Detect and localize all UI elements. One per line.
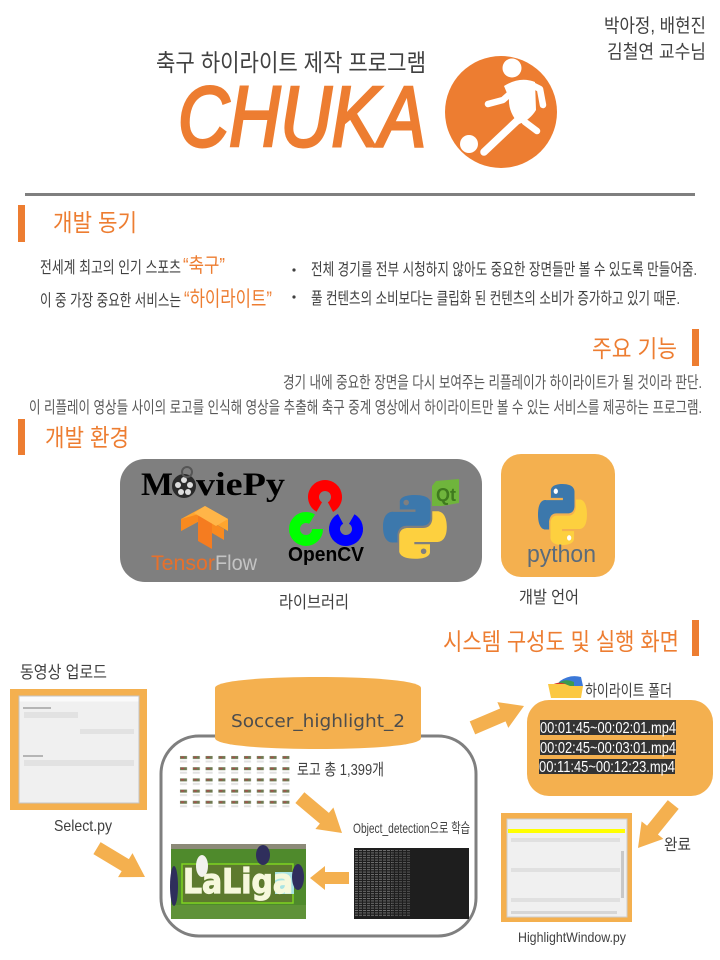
authors xyxy=(604,15,706,63)
authors: 김철연 교수님 xyxy=(607,41,706,63)
logo: OpenCV xyxy=(288,481,365,566)
label: highlight folder: 하이라이트 폴더 xyxy=(585,682,672,700)
logo: MoviePy xyxy=(141,467,286,503)
text: motivation left: “하이라이트” xyxy=(184,288,272,311)
screenshot: Select.py window xyxy=(10,689,147,810)
arrow: thumbnails to training xyxy=(291,787,351,844)
text: motivation left: “축구” xyxy=(183,254,225,277)
panel: python language: python xyxy=(527,541,596,568)
text: motivation left: 이 중 가장 중요한 서비스는 xyxy=(40,291,181,310)
logo: PyQt: Qt xyxy=(436,485,456,505)
logo: OpenCV: OpenCV xyxy=(288,544,365,566)
logo: PyQt xyxy=(383,479,459,559)
caption: libraries: 라이브러리 xyxy=(279,593,349,612)
screenshot: HighlightWindow.py xyxy=(501,813,632,922)
logo: MoviePy: M xyxy=(141,467,173,503)
logo wordmark: CHUKA: CHUKA xyxy=(178,70,426,165)
arrow: database to folder xyxy=(467,693,529,741)
file: clip 3: 00:11:45~00:12:23.mp4 xyxy=(539,759,675,776)
panel: libraries xyxy=(120,459,482,582)
panel: highlight file list xyxy=(527,700,713,796)
heading: main features: 주요 기능 xyxy=(592,336,677,363)
image: LaLiga detection result xyxy=(170,844,306,919)
heading: motivation xyxy=(18,205,137,242)
heading: dev environment xyxy=(18,419,129,455)
logo: TensorFlow xyxy=(151,506,258,575)
logo: MoviePy: viePy xyxy=(196,467,286,503)
authors: 박아정, 배현진 xyxy=(604,15,706,37)
database cylinder: Soccer_highlight_2: Soccer_highlight_2 xyxy=(231,711,405,732)
image: logo training thumbnails xyxy=(177,754,292,810)
arrow: training to detection xyxy=(310,866,349,890)
text: motivation bullets xyxy=(292,260,697,308)
logo: TensorFlow: Flow xyxy=(215,552,258,575)
panel: python language xyxy=(501,454,615,577)
label: object detection training: Object_detection으로 학습 xyxy=(353,820,470,836)
subtitle: program description: 축구 하이라이트 제작 프로그램 xyxy=(156,50,426,77)
label: logo count: 로고 총 1,399개 xyxy=(297,761,384,779)
logo: TensorFlow: Tensor xyxy=(151,552,215,575)
heading: system architecture: 시스템 구성도 및 실행 화면 xyxy=(443,629,679,656)
icon: folder xyxy=(548,676,583,698)
label: video upload: 동영상 업로드 xyxy=(20,663,107,682)
image: LaLiga detection result: LaLiga xyxy=(183,862,293,902)
text: motivation left xyxy=(40,254,272,311)
heading: motivation: 개발 동기 xyxy=(53,210,137,237)
caption: HighlightWindow.py: HighlightWindow.py xyxy=(518,929,626,945)
heading: main features xyxy=(592,329,699,366)
heading: dev environment: 개발 환경 xyxy=(45,425,129,452)
text: main features description xyxy=(29,373,702,417)
arrow: folder to window xyxy=(627,796,684,857)
caption: language: 개발 언어 xyxy=(519,588,579,607)
caption: Select.py: Select.py xyxy=(54,818,112,835)
file: clip 1: 00:01:45~00:02:01.mp4 xyxy=(540,720,676,737)
label: done: 완료 xyxy=(664,836,691,854)
icon: python logo xyxy=(538,484,587,545)
image: training terminal output xyxy=(354,848,469,919)
panel: processing container xyxy=(161,736,476,936)
database cylinder: Soccer_highlight_2 xyxy=(215,677,421,749)
arrow: upload to processing xyxy=(90,836,152,889)
file: clip 2: 00:02:45~00:03:01.mp4 xyxy=(540,740,676,757)
text: motivation left: 전세계 최고의 인기 스포츠 xyxy=(40,258,181,277)
logo icon: soccer player in orange circle xyxy=(445,56,557,168)
